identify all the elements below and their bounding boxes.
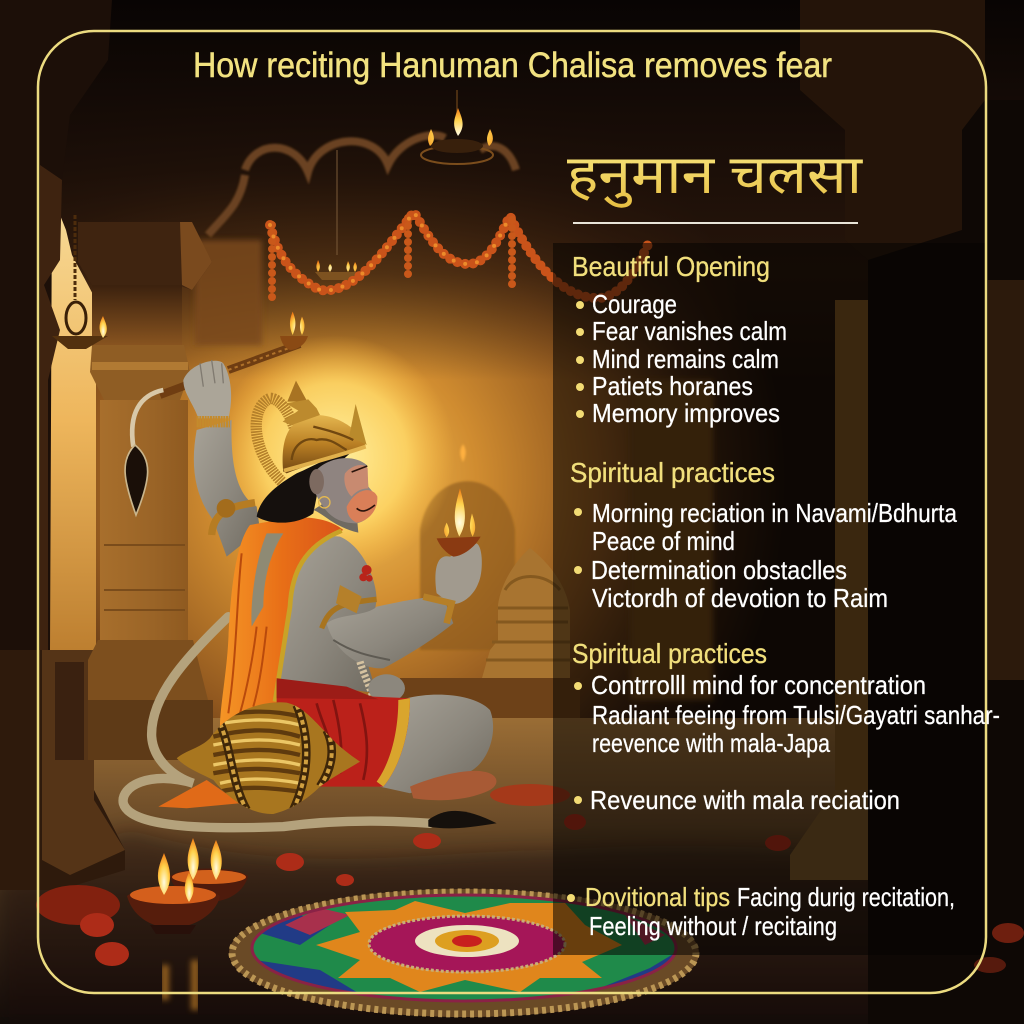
back diya oil xyxy=(172,870,246,884)
bullet list: Morning reciation in Navami/Bdhurta xyxy=(592,498,957,528)
red centre xyxy=(452,935,482,947)
bullet dots xyxy=(576,301,584,418)
finger lines xyxy=(200,360,223,387)
face xyxy=(312,458,377,523)
lamp plate xyxy=(52,336,108,349)
black big pillar xyxy=(868,100,1024,1024)
chain xyxy=(74,215,76,300)
hand holding diya xyxy=(435,543,482,604)
dish xyxy=(315,272,358,280)
pillar base lit xyxy=(790,790,868,880)
handle twist xyxy=(228,344,300,370)
outer fringe xyxy=(229,889,699,1017)
front diya oil xyxy=(130,886,216,904)
back diya bowl xyxy=(170,868,248,902)
heading: Beautiful Opening xyxy=(572,251,770,282)
crown spire xyxy=(287,381,307,402)
waist band xyxy=(277,678,378,699)
hair xyxy=(257,453,350,523)
diya flames xyxy=(444,488,475,537)
ceiling chandelier xyxy=(421,90,493,164)
yellow ring xyxy=(435,930,499,952)
flames xyxy=(158,853,170,895)
left outer pillar xyxy=(0,0,125,890)
waist garland xyxy=(360,662,373,698)
section: Spiritual practices 2 xyxy=(572,638,1000,815)
wrist bangle xyxy=(197,405,230,439)
upper cusped arches xyxy=(208,135,516,235)
magenta disc xyxy=(369,916,565,972)
beard xyxy=(313,497,358,533)
capital side xyxy=(180,222,212,290)
bullet list: Mind remains calm xyxy=(592,344,779,374)
mace stripes xyxy=(213,712,300,792)
crown ornament xyxy=(292,427,353,460)
rangoli xyxy=(229,889,699,1017)
section: Beautiful Opening xyxy=(572,251,787,428)
orange cloth xyxy=(158,780,240,808)
bullet list: Courage xyxy=(592,289,677,319)
title: How reciting Hanuman Chalisa removes fear xyxy=(193,46,832,85)
collar highlight xyxy=(92,362,188,370)
foot xyxy=(410,771,496,800)
right wall dim strip xyxy=(988,280,1024,680)
blue and red patches xyxy=(260,909,672,992)
ring outline xyxy=(252,895,676,1001)
bullet list: Contrrolll mind for concentration xyxy=(591,670,926,700)
hook tuft xyxy=(125,445,148,515)
crown discs xyxy=(283,399,320,425)
bullet list xyxy=(592,289,787,428)
lamp ring xyxy=(66,302,86,334)
capital xyxy=(78,222,212,290)
front diya bowl xyxy=(127,887,220,928)
stem xyxy=(456,90,458,125)
bullet list: Peace of mind xyxy=(592,526,735,556)
bright gap beside pillar xyxy=(50,190,96,650)
lit alcove behind column xyxy=(195,240,262,345)
collar xyxy=(90,345,190,400)
dark text panel xyxy=(553,243,985,955)
base shade xyxy=(88,700,213,760)
carving lines xyxy=(104,545,185,610)
floor shadow xyxy=(0,830,1000,1024)
handle hook xyxy=(132,390,163,447)
pillar capital xyxy=(800,0,985,260)
bullet list: Reveunce with mala reciation xyxy=(590,785,900,815)
heading: Spiritual practices xyxy=(572,638,767,669)
dhoti gold border xyxy=(377,698,410,787)
ear xyxy=(309,469,324,494)
knee xyxy=(368,674,405,702)
bullet list: Victordh of devotion to Raim xyxy=(592,583,888,613)
bullet list xyxy=(591,498,957,613)
foot xyxy=(150,925,196,934)
coloured ring xyxy=(252,895,676,1001)
back wall platform xyxy=(400,678,580,720)
bullet list: reevence with mala-Japa xyxy=(592,728,830,758)
crown spike xyxy=(349,404,367,445)
bullet list: Determination obstaclles xyxy=(591,555,847,585)
bullet dot xyxy=(567,894,575,902)
flames xyxy=(428,108,493,146)
small temple xyxy=(482,548,572,678)
heading rule xyxy=(573,222,858,224)
section: devotional tips xyxy=(567,882,955,941)
shaft xyxy=(100,400,188,640)
armlet medallion xyxy=(336,585,362,613)
string xyxy=(336,150,338,255)
halo glow xyxy=(215,335,455,575)
crown band xyxy=(284,447,366,471)
bowl on handle xyxy=(280,336,308,350)
hanging lamp left xyxy=(52,215,108,349)
Hindi heading: हनुमान चलसा xyxy=(567,146,863,216)
upper armlet xyxy=(322,599,377,628)
marigold garland xyxy=(270,212,650,298)
crown dome xyxy=(283,415,366,473)
bullet dots xyxy=(574,682,582,804)
raised hand xyxy=(183,361,231,418)
sash xyxy=(220,518,343,727)
base xyxy=(88,640,213,760)
rings xyxy=(421,146,493,164)
upper arm shadow xyxy=(333,640,390,660)
small chandelier xyxy=(315,150,358,280)
sash gold edge xyxy=(275,531,342,702)
brow patch xyxy=(344,465,368,497)
distant arch shrine xyxy=(420,444,515,650)
orange star xyxy=(316,901,622,992)
tail tuft xyxy=(428,811,497,828)
dhoti folds xyxy=(317,700,367,780)
bullet list: Fear vanishes calm xyxy=(592,316,787,346)
sash folds xyxy=(228,553,267,713)
eye and mouth xyxy=(352,466,375,511)
earring xyxy=(319,497,330,508)
label: Dovitional tips xyxy=(585,882,730,912)
floor xyxy=(0,718,1024,1024)
torso xyxy=(280,536,377,693)
diyas on floor xyxy=(127,838,248,1010)
wrist band xyxy=(423,597,452,623)
raised arm xyxy=(194,420,260,557)
carved left column xyxy=(78,222,213,760)
mid lit column xyxy=(630,380,713,700)
crown fan xyxy=(256,398,295,482)
neck xyxy=(92,285,182,347)
right pillars xyxy=(630,0,1024,1024)
mace handle xyxy=(160,344,300,395)
bullet list: Memory improves xyxy=(592,398,780,428)
flames xyxy=(316,260,357,272)
tip text: Facing durig recitation, xyxy=(737,882,955,912)
forearm xyxy=(327,597,453,668)
section: Spiritual practices 1 xyxy=(570,457,957,613)
mace rings xyxy=(220,705,332,810)
lamp flame xyxy=(100,316,107,338)
chest flowers xyxy=(359,565,373,582)
handle flames xyxy=(290,312,305,335)
leg xyxy=(380,695,493,793)
tail xyxy=(123,617,430,828)
bullet list xyxy=(590,670,1000,815)
armlet medallion xyxy=(217,499,235,518)
bullet dots xyxy=(574,508,582,574)
diya bowl xyxy=(437,537,481,557)
sash inner strip xyxy=(251,533,283,627)
mid column pale strip xyxy=(835,300,868,800)
dhoti xyxy=(277,680,410,787)
ceiling darkness xyxy=(0,0,1024,380)
white petals xyxy=(415,925,519,957)
heading: Spiritual practices xyxy=(570,457,775,488)
armlet xyxy=(212,503,255,535)
bullet list: Patiets horanes xyxy=(592,371,753,401)
mace head xyxy=(173,700,363,817)
floor reflections xyxy=(165,960,195,1010)
muzzle xyxy=(347,490,377,523)
mace base xyxy=(173,700,363,817)
scattered petals and flowers xyxy=(36,784,1024,973)
tip text line 2: Feeling without / recitaing xyxy=(589,911,837,941)
Hanuman figure xyxy=(123,312,497,828)
